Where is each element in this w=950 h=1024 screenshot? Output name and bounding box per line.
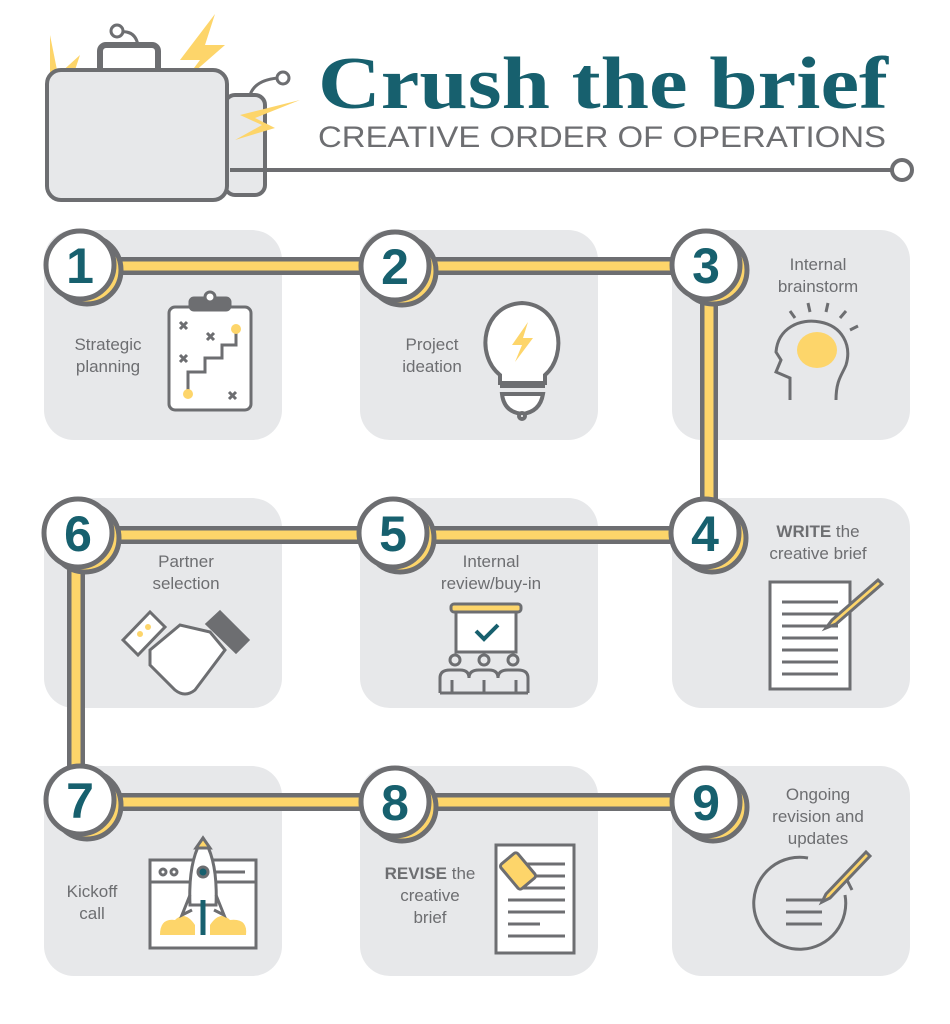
step labels: Kickoff [67, 882, 118, 901]
step number circles: 8 [381, 775, 409, 831]
icon: revise document [496, 845, 574, 953]
icon: presentation audience [440, 604, 528, 693]
icon: clipboard [169, 292, 251, 410]
icon: lightbulb [485, 303, 558, 419]
step labels: REVISE the [385, 864, 475, 883]
step labels: selection [152, 574, 220, 593]
icon: document with pencil [770, 580, 882, 689]
step number circles: 1 [66, 238, 94, 294]
step number circles: 7 [66, 773, 94, 829]
step labels: Internal [790, 255, 846, 274]
step labels: brainstorm [778, 277, 858, 296]
step number circles: 5 [379, 506, 407, 562]
step labels: Ongoing [786, 785, 850, 804]
panels [44, 230, 910, 976]
step labels: Project [406, 335, 459, 354]
step labels: review/buy-in [441, 574, 541, 593]
icon: rocket browser [150, 838, 256, 948]
title: Crush the brief [318, 43, 890, 125]
step labels: Partner [158, 552, 214, 571]
icon: revision cycle [754, 852, 870, 949]
icon: handshake [123, 612, 248, 694]
step labels: brief [413, 908, 447, 927]
step labels: Internal [463, 552, 519, 571]
step labels: Strategic [74, 335, 142, 354]
step labels: creative brief [769, 544, 867, 563]
step number circles: 3 [692, 238, 720, 294]
step number circles: 6 [64, 506, 92, 562]
icon: briefcase [47, 14, 912, 200]
connector path [76, 266, 709, 802]
subtitle: CREATIVE ORDER OF OPERATIONS [318, 121, 886, 154]
step labels: creative [400, 886, 460, 905]
step labels: planning [76, 357, 140, 376]
step number circles [44, 231, 747, 841]
step labels: revision and [772, 807, 864, 826]
step number circles: 4 [691, 506, 719, 562]
step number circles: 2 [381, 239, 409, 295]
step labels: updates [788, 829, 848, 848]
step labels [67, 255, 867, 927]
step labels: WRITE the [776, 522, 860, 541]
step labels: call [79, 904, 105, 923]
step labels: ideation [402, 357, 462, 376]
step number circles: 9 [692, 775, 720, 831]
icon: head with brain [776, 303, 858, 400]
